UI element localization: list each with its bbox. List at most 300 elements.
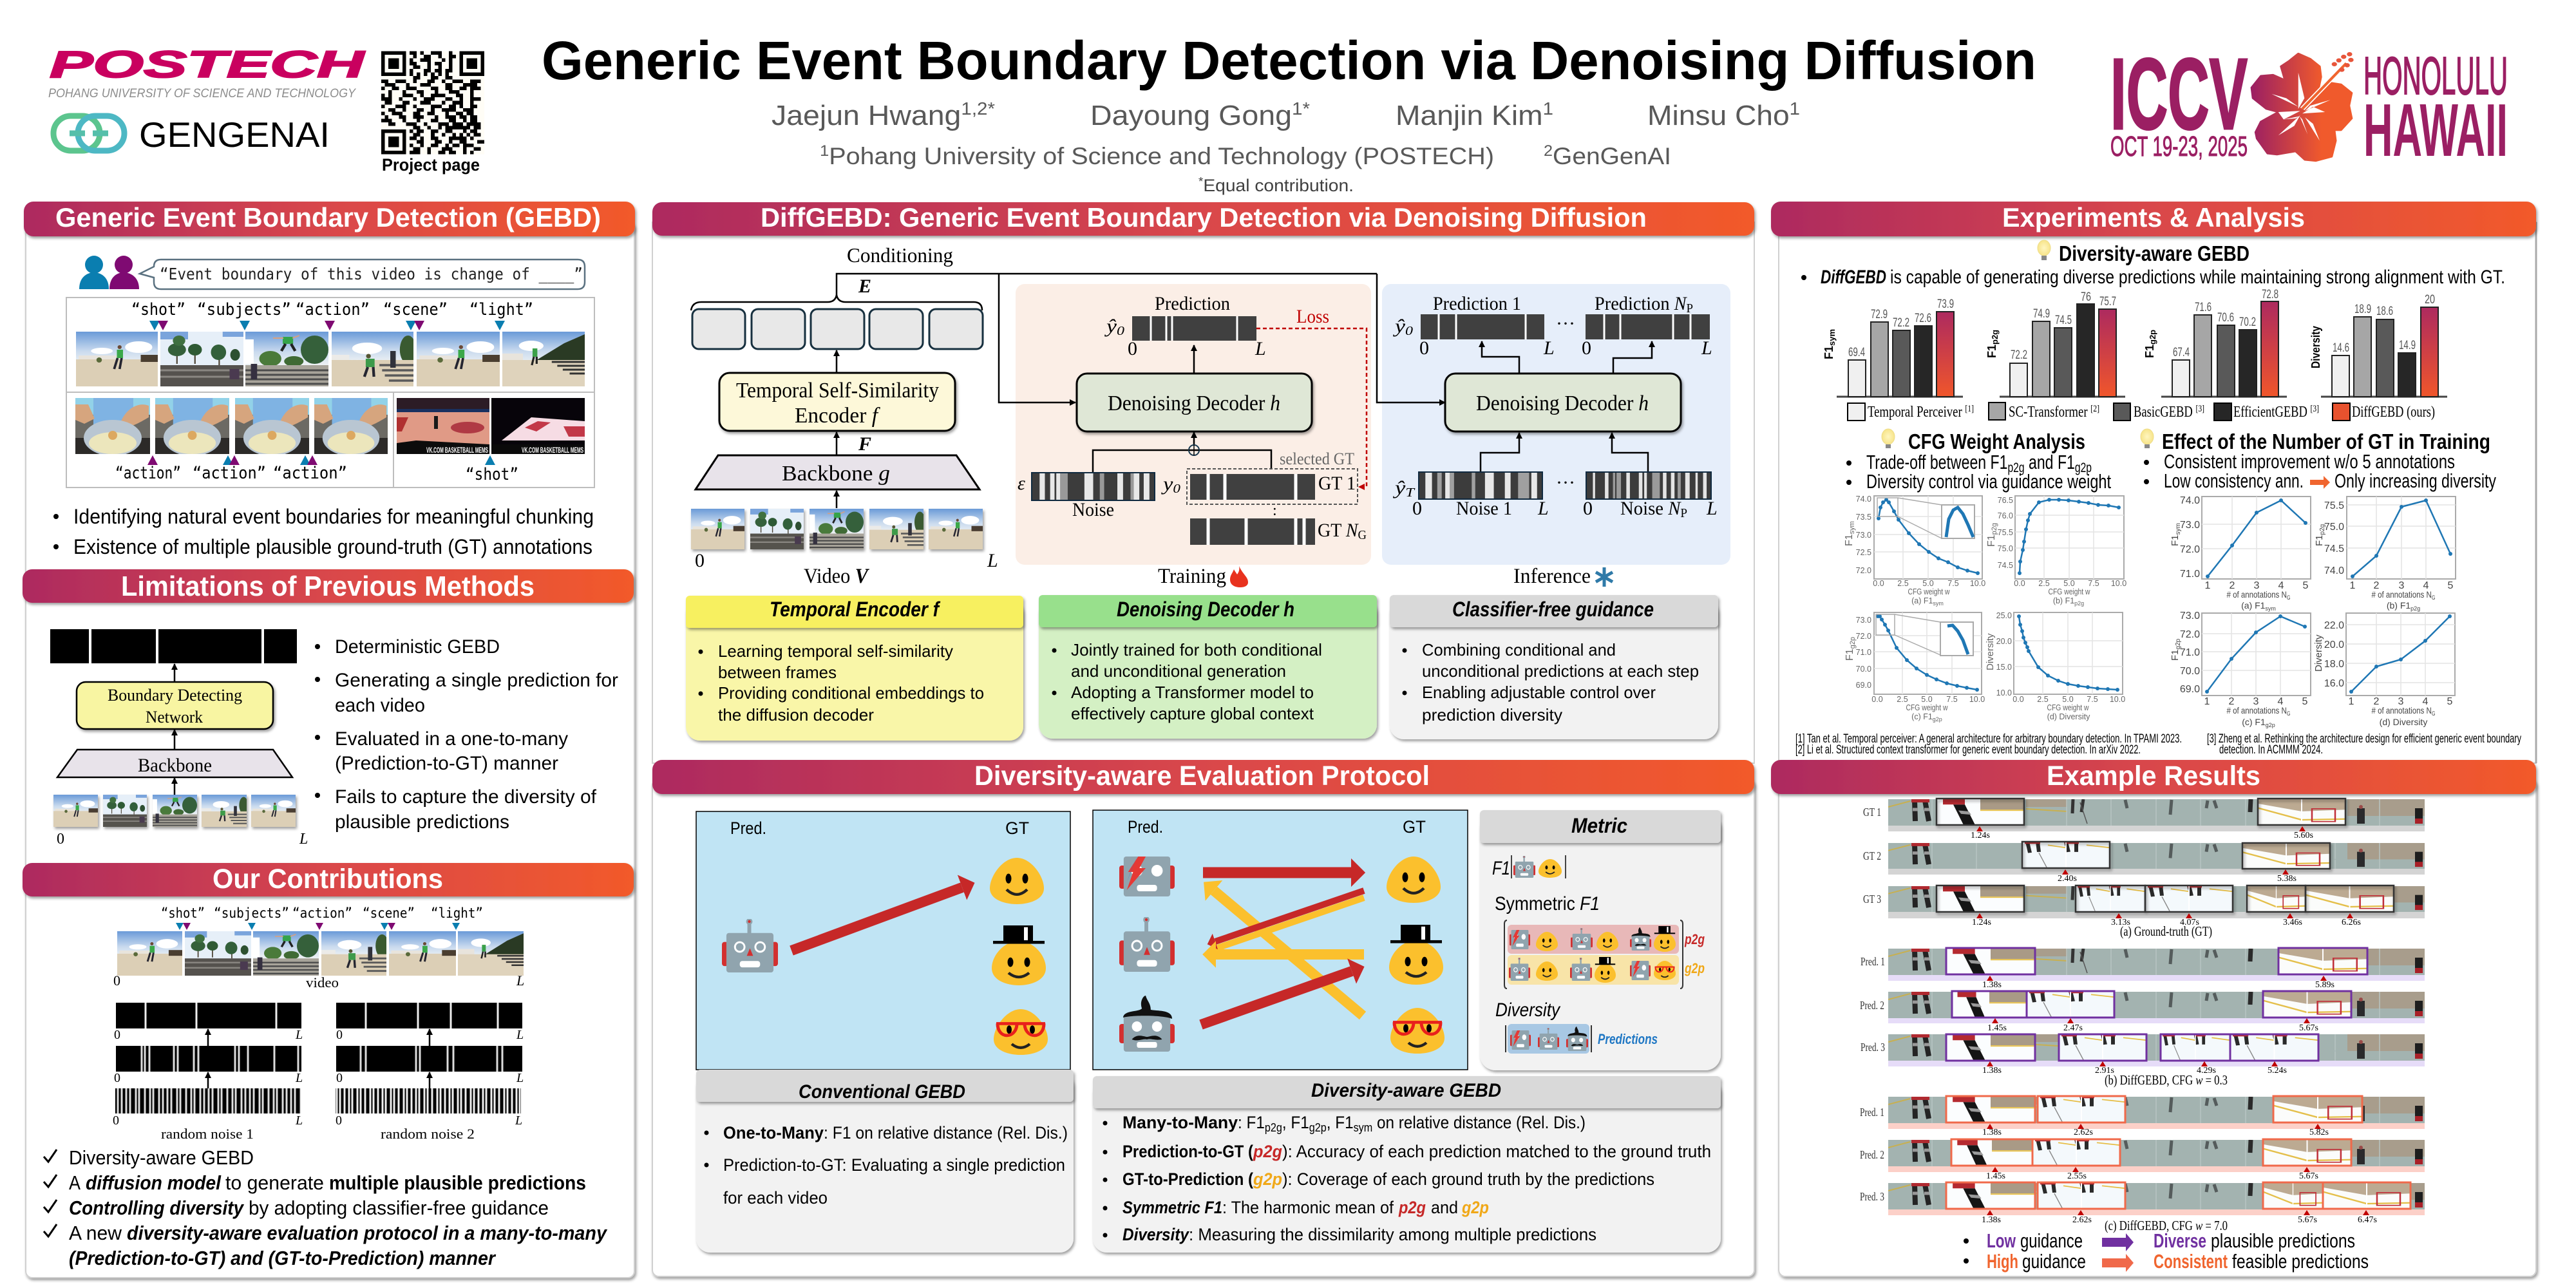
line chart: GT F1p2g: 4: [2423, 580, 2429, 591]
references: detection. In ACMMM 2024.: [2219, 743, 2323, 757]
bar chart: F1p2g: 75.7: [2099, 295, 2116, 308]
limitation bullets: Generating a single prediction for: [335, 670, 618, 691]
bar chart: F1sym: 72.6: [1915, 312, 1931, 325]
speech bubble: [140, 260, 585, 289]
line chart: GT F1sym: 1: [2205, 580, 2211, 591]
guidance takeaways: Diverse: [2154, 1229, 2206, 1252]
boundary labels top: “light”: [469, 300, 533, 319]
heading: Diversity-aware Evaluation Protocol: [974, 761, 1430, 791]
ground-truth strips: [1863, 799, 2425, 939]
line chart: CFG F1sym: sym: [1848, 521, 1856, 534]
axis labels: L: [516, 1071, 524, 1085]
bullets: g2p: [1461, 1198, 1489, 1217]
bullets: p2g: [1265, 1121, 1282, 1134]
low guidance prediction strips: 1.38s: [1982, 1066, 2002, 1075]
card bullets: [698, 641, 984, 724]
denoising decoder: [1077, 374, 1312, 431]
bar chart: Diversity: Diversity: [2309, 326, 2322, 368]
inference noise inputs: L: [1537, 498, 1549, 519]
affiliations: 1: [820, 142, 829, 160]
guidance takeaways: guidance: [2020, 1229, 2083, 1252]
labels: “action”: [292, 905, 352, 921]
limitation bullets: (Prediction-to-GT) manner: [335, 753, 558, 774]
inference noise inputs: P: [1680, 506, 1687, 520]
symmetric F1: [1495, 893, 1705, 989]
boundary labels bottom: [115, 464, 518, 484]
subsection: CFG Weight Analysis: g2p: [2075, 460, 2092, 475]
bar chart: F1g2p: 71.6: [2195, 301, 2211, 314]
line chart: GT F1p2g: [2314, 497, 2456, 612]
high guidance prediction strips: 2.62s: [2074, 1128, 2093, 1137]
robot: [722, 918, 778, 972]
guidance takeaways: plausible predictions: [2211, 1229, 2355, 1252]
line chart: CFG F1sym: 2.5: [1897, 579, 1909, 588]
line chart: GT Diversity: [2313, 613, 2455, 727]
boundary labels top: [131, 300, 533, 319]
line chart: GT F1p2g: F1: [2314, 535, 2325, 546]
line chart: CFG F1g2p: 2.5: [1897, 695, 1908, 704]
line chart: CFG F1g2p: 70.0: [1856, 665, 1871, 674]
subsection: Effect of the Number of GT: Low consistency ann.: [2164, 469, 2304, 492]
subsection: CFG Weight Analysis: p2g: [2007, 460, 2025, 475]
noise: ε: [1018, 473, 1025, 494]
line chart: GT Diversity: 1: [2349, 696, 2354, 707]
axis labels: [57, 831, 308, 848]
QR code: Project page: [382, 155, 480, 175]
bar chart: F1g2p: [2143, 288, 2287, 397]
ground truths: [1187, 469, 1367, 545]
diagram: previous method: [50, 629, 308, 848]
line chart: CFG Diversity: 10.0: [1996, 688, 2012, 697]
line chart: CFG Diversity: CFG weight w: [2047, 703, 2089, 712]
line chart: GT F1p2g: 74.5: [2324, 544, 2344, 554]
denoising bars, right: [336, 1003, 522, 1113]
bar chart: F1g2p: F1: [2143, 345, 2156, 358]
labels: Pred.: [1128, 817, 1163, 837]
line chart: GT F1p2g: 3: [2399, 580, 2405, 591]
frames: [117, 931, 524, 976]
line chart: GT F1p2g: p2g: [2410, 605, 2420, 612]
line chart: GT Diversity: G: [2432, 710, 2436, 717]
line chart: CFG F1p2g: 10.0: [2111, 579, 2126, 588]
diagram: conventional: [696, 811, 1070, 1070]
high guidance prediction strips: 1.38s: [1982, 1128, 2002, 1137]
legend: [3]: [2195, 404, 2204, 414]
ground truths: GT N: [1318, 520, 1359, 541]
affiliations: GenGenAI: [1553, 143, 1671, 169]
diagram: diversity-aware: [1093, 810, 1468, 1070]
bullets: , F1: [1327, 1113, 1354, 1132]
temporal encoder: Temporal Self-Similarity: [736, 379, 939, 402]
video label: L: [516, 972, 524, 989]
ground-truth strips: 2.40s: [2058, 874, 2077, 884]
low guidance prediction strips: 5.89s: [2315, 980, 2334, 990]
line chart: GT F1p2g: 75.5: [2324, 500, 2344, 511]
authors: Dayoung Gong: [1090, 100, 1281, 131]
bullets: [1103, 1113, 1711, 1244]
line chart: CFG F1p2g: 75.5: [1998, 528, 2013, 537]
line chart: GT F1g2p: 72.0: [2180, 629, 2200, 640]
line chart: GT F1g2p: 70.0: [2180, 666, 2200, 677]
subsection: Diversity-aware GEBD: Diversity-aware GEBD: [2059, 242, 2249, 265]
ground-truth strips: 1.24s: [1972, 918, 1991, 927]
line chart: GT F1p2g: G: [2432, 594, 2436, 601]
labels: “subjects”: [214, 905, 289, 921]
bar chart: F1sym: 69.4: [1848, 346, 1865, 359]
line chart: CFG F1sym: 73.0: [1856, 531, 1871, 540]
boundary labels bottom: “action”: [193, 464, 266, 483]
line chart: GT F1g2p: [2170, 611, 2311, 728]
line chart: CFG F1p2g: F1: [1986, 535, 1997, 547]
contributions checklist: diversity-aware evaluation protocol in a many-to-many: [127, 1222, 608, 1244]
legend: SC-Transformer: [2009, 404, 2109, 421]
logo: POSTECH: POHANG UNIVERSITY OF SCIENCE AND TECHNOLOGY: [48, 87, 356, 100]
labels: “scene”: [363, 905, 415, 921]
card bullets: Jointly trained for both conditional: [1071, 640, 1322, 659]
line chart: CFG Diversity: 25.0: [1996, 611, 2012, 620]
arrows left stack: [836, 350, 837, 508]
heading: Experiments & Analysis: [2002, 202, 2305, 232]
inference noise inputs: 0: [1412, 498, 1422, 519]
axis labels: 0: [114, 1071, 120, 1085]
contributions checklist: (Prediction-to-GT) and (GT-to-Prediction) manner: [69, 1247, 497, 1269]
axis labels: L: [515, 1113, 522, 1128]
high guidance prediction strips: (c) DiffGEBD, CFG w = 7.0: [2105, 1218, 2228, 1233]
line chart: GT F1g2p: 4: [2278, 696, 2284, 707]
low guidance prediction strips: Pred. 3: [1861, 1041, 1885, 1054]
inference outputs: Prediction 1: [1433, 293, 1521, 314]
line chart: CFG F1p2g: p2g: [1991, 523, 1998, 535]
logo: ICCV Honolulu Hawaii: ICCV: [2110, 38, 2248, 151]
authors: Manjin Kim: [1396, 100, 1536, 131]
GEBD bullets: Existence of multiple plausible ground-truth (GT) annotations: [73, 535, 592, 558]
ground-truth strips: GT 2: [1863, 849, 1881, 862]
card bullets: between frames: [718, 663, 837, 682]
card heading: [1039, 595, 1377, 627]
line chart: GT F1sym: F1: [2170, 535, 2181, 546]
subsection: CFG Weight Analysis: Diversity control via guidance weight: [1866, 470, 2111, 493]
line chart: CFG F1p2g: 74.5: [1998, 561, 2013, 570]
inference outputs: 0: [1405, 324, 1413, 338]
boundary markers bottom: [147, 455, 495, 465]
limitation bullets: Evaluated in a one-to-many: [335, 728, 568, 750]
video labels: [695, 550, 998, 588]
ground-truth strips: 3.46s: [2283, 918, 2302, 927]
high guidance prediction strips: 1.38s: [1982, 1215, 2001, 1225]
authors: 1,2*: [961, 99, 995, 118]
card: Conventional GEBD: [696, 1070, 1074, 1253]
line chart: GT F1sym: sym: [2175, 523, 2182, 535]
contributions checklist: multiple plausible predictions: [329, 1171, 586, 1194]
line chart: CFG F1p2g: p2g: [2074, 600, 2084, 607]
boundary labels top: “action”: [296, 300, 370, 319]
references: [2] Li et al. Structured context transformer for generic event boundary detection. In arXiv 2022.: [1795, 743, 2141, 757]
card bullets: the diffusion decoder: [718, 705, 874, 724]
axis labels: L: [295, 1113, 303, 1128]
line chart: CFG Diversity: 15.0: [1996, 663, 2012, 672]
line chart: GT F1g2p: 1: [2204, 696, 2210, 707]
bar chart: Diversity: 14.6: [2333, 341, 2349, 355]
subsection: CFG Weight Analysis: and F1: [2025, 451, 2075, 473]
line chart: GT F1sym: 5: [2303, 580, 2309, 591]
bar chart: F1g2p: g2p: [2148, 330, 2157, 345]
basketball video frames: [397, 398, 585, 455]
legend: EfficientGEBD: [2233, 404, 2329, 421]
legend: Temporal Perceiver: [1868, 404, 1989, 421]
bullets: One-to-Many: [723, 1123, 824, 1142]
line chart: CFG F1p2g: 75.0: [1998, 544, 2013, 553]
authors: 1*: [1292, 99, 1310, 118]
GEBD bullets: [53, 505, 594, 558]
prediction output: Prediction: [1155, 293, 1230, 314]
card: Metric: [1480, 810, 1721, 1070]
bar chart: F1g2p: 72.8: [2262, 288, 2278, 301]
guidance takeaways: guidance: [2022, 1250, 2086, 1273]
noise labels: [161, 1126, 475, 1142]
line chart: CFG Diversity: 10.0: [2110, 695, 2125, 704]
line chart: CFG F1g2p: [1844, 612, 1985, 723]
prediction output: ŷ: [1106, 316, 1115, 337]
inference outputs: 0: [1582, 337, 1591, 359]
video label: video: [306, 974, 339, 990]
line chart: GT F1g2p: 2: [2229, 696, 2235, 707]
line chart: GT F1sym: 4: [2278, 580, 2284, 591]
bar chart: F1p2g: 72.2: [2011, 348, 2027, 362]
card heading: Temporal Encoder f: [770, 598, 941, 621]
boundary labels top: “subjects”: [197, 300, 291, 319]
card bullets: Learning temporal self-similarity: [718, 641, 953, 661]
line chart: CFG Diversity: 20.0: [1996, 637, 2012, 646]
F1 formula: [1492, 855, 1566, 879]
authors: Jaejun Hwang: [772, 100, 951, 131]
card: Denoising Decoder: [1039, 595, 1377, 739]
ground-truth strips: 1.24s: [1971, 831, 1990, 840]
low guidance prediction strips: Pred. 2: [1860, 999, 1884, 1012]
logo: GenGenAI: GENGENAI: [139, 115, 330, 155]
bar chart: Diversity: 18.6: [2376, 305, 2393, 318]
decoder arrows: [1193, 345, 1195, 445]
line chart: CFG F1g2p: 71.0: [1856, 648, 1871, 657]
temporal encoder: [719, 373, 955, 431]
ground truths: :: [1273, 502, 1277, 519]
line chart: GT F1g2p: g2p: [2175, 638, 2182, 649]
contributions checklist: diffusion model: [86, 1171, 222, 1194]
markers: [176, 923, 460, 930]
bullets: ): Coverage of each ground truth by the predictions: [1282, 1170, 1654, 1189]
inference outputs: Prediction N: [1595, 293, 1687, 314]
training label: Training: [1158, 565, 1226, 588]
line chart: CFG F1g2p: g2p: [1849, 637, 1857, 649]
denoising decoder: [1445, 374, 1681, 431]
high guidance prediction strips: Pred. 1: [1860, 1106, 1884, 1119]
low guidance prediction strips: 1.45s: [1987, 1023, 2007, 1033]
line chart: GT F1g2p: 69.0: [2180, 684, 2200, 695]
low guidance prediction strips: 2.91s: [2095, 1066, 2114, 1075]
robots: [1119, 857, 1175, 1052]
inference noise inputs: ···: [1556, 472, 1575, 493]
authors: 1: [1543, 99, 1553, 118]
equal contribution note: Equal contribution.: [1203, 176, 1354, 195]
line chart: GT F1p2g: (b) F1: [2387, 600, 2410, 611]
inference noise inputs: ŷ: [1395, 477, 1403, 498]
video examples box: [66, 298, 594, 488]
high guidance prediction strips: 5.82s: [2309, 1128, 2329, 1137]
limitation bullets: each video: [335, 695, 425, 716]
line chart: CFG F1p2g: [1986, 496, 2126, 607]
high guidance prediction strips: 6.47s: [2358, 1215, 2377, 1225]
icon: two annotators: [79, 256, 139, 289]
line chart: GT Diversity: 3: [2398, 696, 2404, 707]
line chart: GT F1sym: 71.0: [2180, 569, 2200, 580]
line chart: CFG F1g2p: CFG weight w: [1906, 703, 1948, 712]
bar chart: F1sym: sym: [1827, 329, 1837, 346]
low guidance prediction strips: Pred. 1: [1861, 955, 1885, 968]
panel: Example Results: [1771, 760, 2536, 1276]
axis labels: 0: [114, 1028, 120, 1042]
panel: DiffGEBD: [652, 202, 1754, 763]
heading: Our Contributions: [23, 863, 634, 896]
line chart: GT Diversity: 22.0: [2324, 620, 2344, 631]
card heading: [1390, 595, 1718, 627]
heading: [1771, 202, 2536, 236]
axis labels: L: [516, 1028, 524, 1042]
axis labels: 0: [113, 1113, 119, 1128]
bar chart: Diversity: 20: [2425, 293, 2435, 307]
arrows: [1201, 873, 1364, 1025]
conditioning wires: [837, 274, 1445, 402]
arrows: [174, 664, 175, 795]
boundary labels bottom: “shot”: [466, 465, 518, 484]
line chart: GT F1p2g: p2g: [2319, 524, 2326, 535]
legend: BasicGEBD: [2134, 404, 2210, 421]
line chart: GT F1g2p: 3: [2253, 696, 2259, 707]
inference outputs: 0: [1419, 337, 1429, 359]
high guidance prediction strips: Pred. 2: [1860, 1148, 1884, 1161]
line chart: GT F1g2p: (c) F1: [2242, 717, 2266, 727]
inference noise inputs: Noise N: [1620, 498, 1681, 519]
bar chart: Diversity: 14.9: [2399, 339, 2416, 352]
guidance takeaways: [1964, 1229, 2369, 1273]
line chart: CFG F1sym: (a) F1: [1911, 596, 1933, 605]
inference wires: [1481, 341, 1652, 472]
limitation bullets: plausible predictions: [335, 811, 509, 833]
video frames: [691, 509, 983, 549]
ground-truth strips: 3.13s: [2111, 918, 2130, 927]
line chart: GT F1p2g: 75.0: [2324, 522, 2344, 533]
heading: GEBD: Generic Event Boundary Detection (GEBD): [55, 202, 601, 232]
ground-truth strips: 4.07s: [2180, 918, 2199, 927]
axis labels: 0: [57, 831, 64, 848]
logo: POSTECH: [48, 44, 365, 100]
line chart: CFG Diversity: 7.5: [2087, 695, 2098, 704]
limitation bullets: Fails to capture the diversity of: [335, 786, 597, 808]
line chart: GT Diversity: 5: [2447, 696, 2453, 707]
inference label: Inference: [1513, 565, 1591, 588]
bar chart: F1p2g: 74.9: [2033, 307, 2050, 321]
line chart: CFG F1sym: 72.0: [1856, 566, 1871, 575]
affiliations: Pohang University of Science and Technology (POSTECH): [829, 143, 1494, 169]
card bullets: Combining conditional and: [1422, 640, 1616, 659]
line chart: CFG Diversity: (d) Diversity: [2047, 712, 2090, 721]
card bullets: effectively capture global context: [1071, 704, 1314, 723]
bar chart: F1sym: F1: [1823, 346, 1835, 359]
line chart: GT F1g2p: # of annotations N: [2227, 705, 2300, 715]
diagram: contributions: [113, 905, 524, 1142]
subsection: Effect of the Number of GT: Consistent improvement w/o 5 annotations: [2164, 450, 2455, 473]
line chart: GT F1g2p: F1: [2170, 649, 2181, 661]
inference section: [1392, 293, 1718, 588]
contributions checklist: [44, 1146, 608, 1269]
bar chart: Diversity: [2309, 293, 2447, 397]
video label: 0: [113, 972, 120, 989]
labels: [1128, 817, 1426, 837]
line chart: CFG F1g2p: 73.0: [1856, 616, 1871, 625]
line chart: GT F1sym: 72.0: [2180, 544, 2200, 555]
bullets: : Measuring the dissimilarity among multiple predictions: [1189, 1225, 1596, 1244]
legend: [1]: [1965, 404, 1974, 414]
denoising bars, left: [115, 1003, 301, 1113]
line chart: CFG F1p2g: (b) F1: [2053, 596, 2074, 605]
high guidance prediction strips: 5.67s: [2298, 1215, 2317, 1225]
inference background: [1382, 284, 1730, 565]
high guidance prediction strips: 1.45s: [1986, 1171, 2005, 1181]
card bullets: Enabling adjustable control over: [1422, 683, 1656, 702]
heading: Limitations: Limitations of Previous Methods: [121, 571, 535, 602]
logo: ICCV Honolulu Hawaii: [2110, 38, 2508, 172]
panel: left column: [23, 202, 635, 1278]
card bullets: prediction diversity: [1422, 705, 1562, 724]
heading: Diversity-aware GEBD: [1311, 1080, 1501, 1101]
heading: Example Results: [2047, 761, 2260, 791]
bullets: , F1: [1282, 1113, 1309, 1132]
bullets: GT-to-Prediction (: [1122, 1170, 1253, 1189]
card heading: Denoising Decoder h: [1117, 598, 1294, 621]
heading: [1480, 810, 1721, 843]
inference noise inputs: L: [1706, 498, 1718, 519]
prediction bar: [50, 629, 297, 663]
symmetric F1: Symmetric F1: [1495, 893, 1600, 914]
subsection: CFG Weight Analysis: CFG Weight Analysis: [1908, 430, 2085, 453]
line chart: GT Diversity: 20.0: [2324, 639, 2344, 650]
bullets: : F1: [1238, 1113, 1586, 1134]
inference outputs: [1392, 293, 1712, 359]
ground-truth strips: 6.26s: [2342, 918, 2361, 927]
line chart: CFG F1p2g: 5.0: [2063, 579, 2075, 588]
title: Generic Event Boundary Detection via Denoising Diffusion: [542, 30, 2036, 91]
high guidance prediction strips: [1860, 1096, 2425, 1233]
noise: Noise: [1072, 499, 1114, 520]
inference outputs: ŷ: [1395, 316, 1403, 337]
line chart: GT Diversity: # of annotations N: [2371, 705, 2445, 715]
arrow: [791, 887, 962, 951]
bullets: Many-to-Many: [1122, 1113, 1238, 1132]
card heading: Classifier-free guidance: [1452, 598, 1654, 621]
line chart: GT F1p2g: 2: [2374, 580, 2380, 591]
line chart: CFG F1g2p: g2p: [1933, 716, 1942, 723]
bullets: : F1 on relative distance (Rel. Dis.): [824, 1123, 1068, 1142]
noise: [1018, 473, 1180, 520]
line chart: CFG F1g2p: 69.0: [1856, 681, 1871, 690]
diversity metric: [1495, 999, 1658, 1054]
panel: Diversity-aware Evaluation Protocol: [652, 760, 1754, 1276]
line chart: GT F1sym: 74.0: [2180, 495, 2200, 506]
line chart: GT F1g2p: 73.0: [2180, 611, 2200, 621]
subsection: Effect of the Number of GT: [2141, 429, 2496, 492]
low guidance prediction strips: 5.67s: [2299, 1023, 2318, 1033]
noise: 0: [1173, 482, 1180, 496]
card bullets: Providing conditional embeddings to: [718, 683, 984, 703]
legend: [1848, 402, 2435, 421]
